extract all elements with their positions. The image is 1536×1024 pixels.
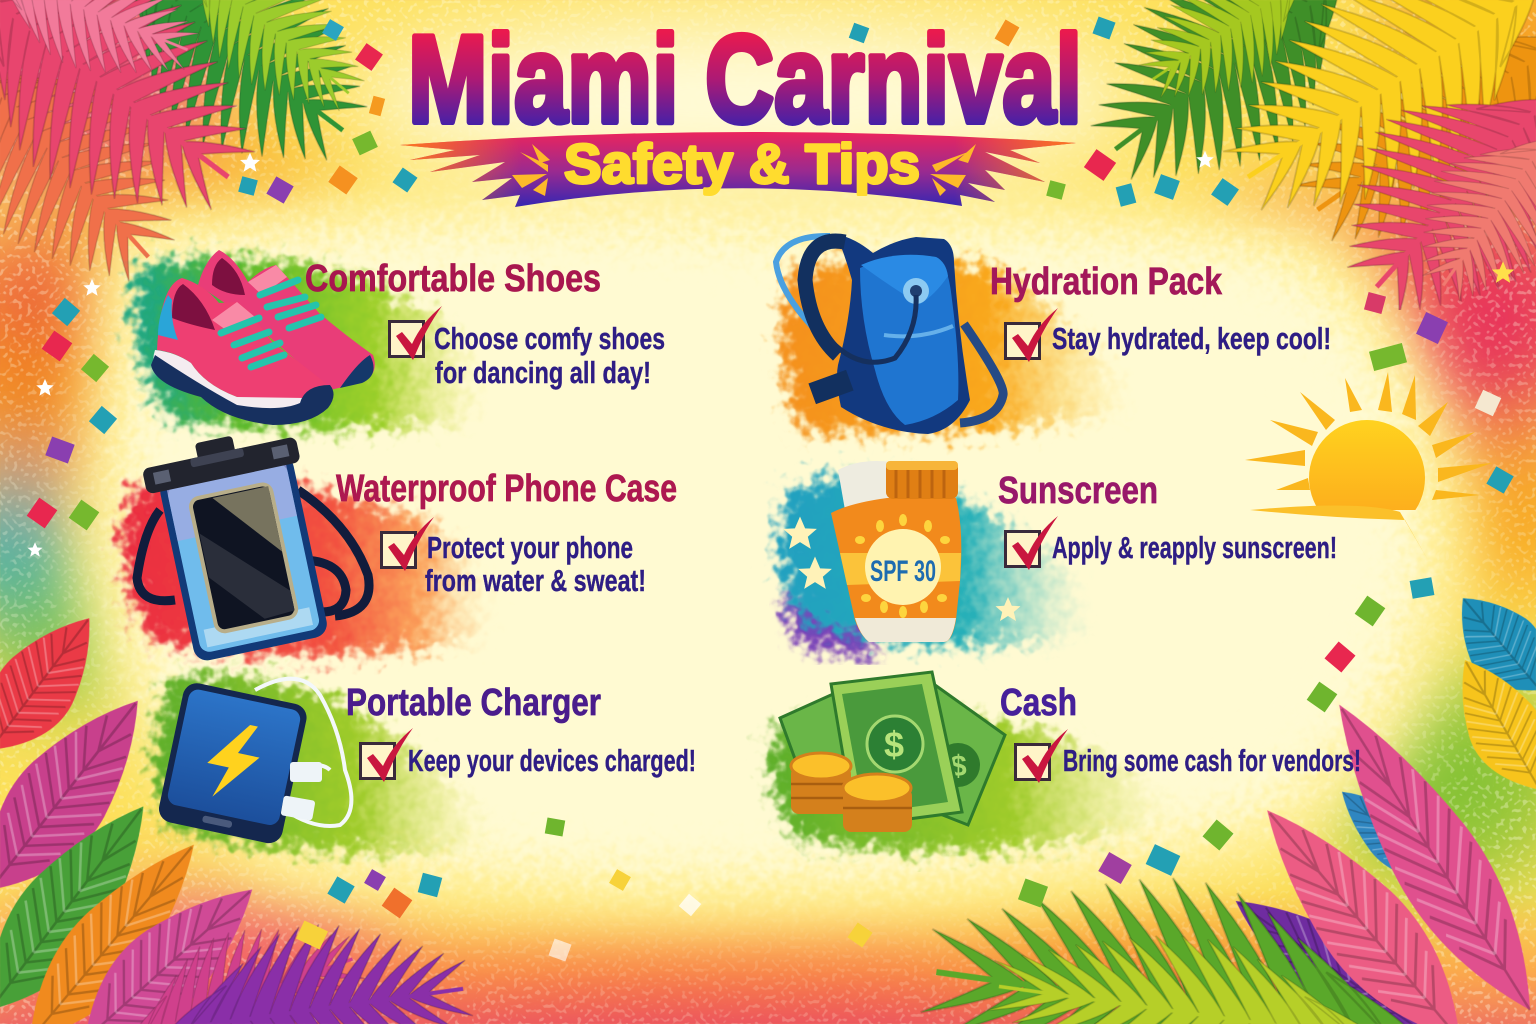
palm fronds: top right [1090,0,1536,310]
heading: Comfortable Shoes [305,258,601,300]
paint splash [123,484,491,655]
icon: power bank [156,679,351,846]
paint splash [782,260,1130,432]
icon: phone case [137,423,369,666]
checkbox [1016,729,1068,783]
checkbox [390,306,442,360]
pale yellow haze [80,183,1470,921]
panel: cash [771,672,1361,851]
tip text [434,321,665,390]
cream centre [125,224,1420,878]
panel: hydration pack [776,234,1331,434]
checkbox [1006,308,1058,362]
panel: portable charger [155,677,702,852]
paint splash [134,258,479,430]
subtitle banner [400,132,1076,207]
stars [783,516,1020,621]
subtitle text: Safety & Tips [564,132,920,195]
tip text: Protect your phone [427,530,633,565]
panel: sunscreen [779,461,1375,655]
tropical leaves: bottom left [0,600,490,1024]
icon: backpack [776,234,1003,434]
title: Miami Carnival [408,11,1082,149]
icon: sun [1245,372,1492,560]
panel: waterproof phone case [123,423,690,666]
tip text: from water & sweat! [425,563,646,598]
heading: Cash [1000,682,1077,724]
tip text: Keep your devices charged! [408,743,696,778]
heading: Sunscreen [998,470,1158,512]
tip text: Apply & reapply sunscreen! [1052,530,1337,565]
paint splash [779,475,1086,645]
icon: bottle [831,461,961,642]
checkbox [382,517,434,571]
checkbox [1006,516,1058,570]
label SPF 30: SPF 30 [870,555,936,588]
panel: comfortable shoes [134,250,665,430]
icon: shoes [151,250,375,425]
tip text: Stay hydrated, keep cool! [1052,321,1331,356]
purple sweep [784,590,880,655]
tip text: Choose comfy shoes [434,321,665,356]
icon: money [780,672,1005,832]
tropical leaves: bottom right [880,580,1536,1024]
icon: money: $ [950,750,967,783]
paint splash [771,715,1171,851]
tip text: for dancing all day! [435,355,651,390]
palm fronds: top left [0,0,380,300]
heading: Hydration Pack [990,261,1223,303]
icon: money: $ [884,724,904,765]
banner sparks [512,144,976,196]
heading: Portable Charger [346,682,601,724]
tip text [425,530,646,598]
tip text: Bring some cash for vendors! [1063,743,1361,778]
paint splash [155,677,488,852]
title glow [345,15,1145,185]
heading: Waterproof Phone Case [336,468,677,510]
checkbox [360,728,413,782]
